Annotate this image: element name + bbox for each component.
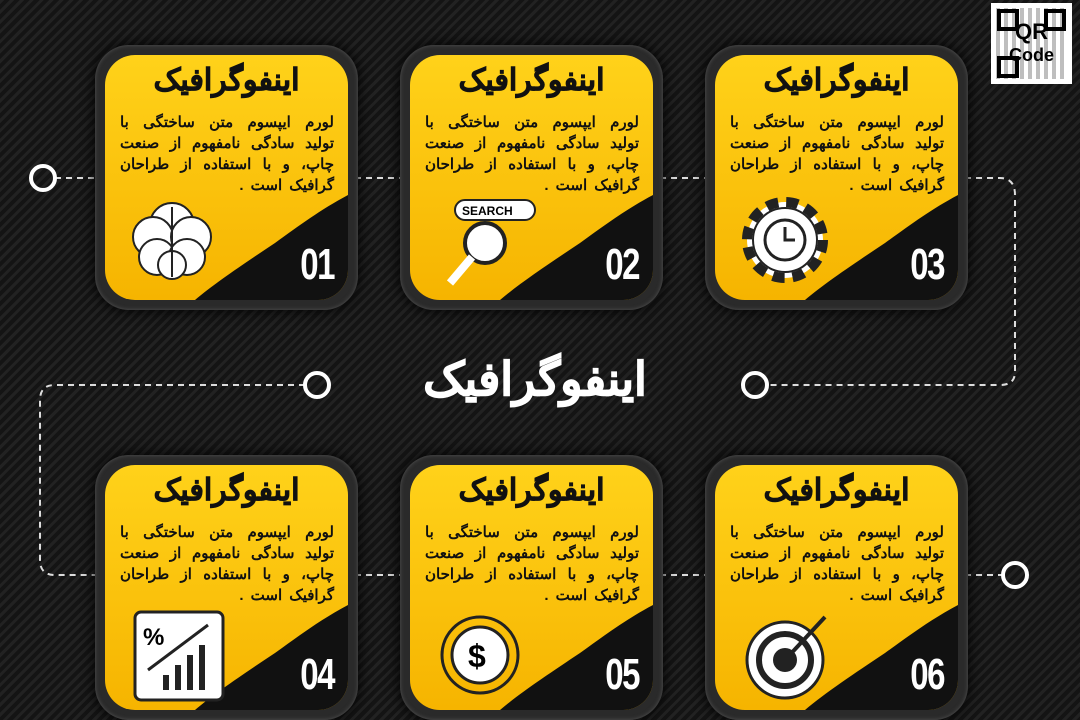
icon: growth chart bbox=[134, 610, 224, 702]
icon: growth chart: % bbox=[143, 624, 164, 651]
icon: brain bbox=[132, 202, 212, 280]
icon: search: SEARCH bbox=[462, 204, 513, 218]
card 05: 05 bbox=[605, 650, 639, 699]
card 02: اینفوگرافیک bbox=[459, 64, 604, 97]
card 06 bbox=[705, 455, 968, 720]
icon: gear clock bbox=[742, 197, 828, 283]
icon: QR code: QR bbox=[1015, 19, 1048, 44]
card 03: اینفوگرافیک bbox=[764, 64, 909, 97]
card 01 bbox=[95, 45, 358, 310]
icon: dollar coin: $ bbox=[468, 638, 486, 674]
icon: target bbox=[746, 616, 826, 700]
card 04: 04 bbox=[300, 650, 334, 699]
card 05 bbox=[400, 455, 663, 720]
icon: QR code: Code bbox=[1009, 45, 1054, 65]
card 01: اینفوگرافیک bbox=[154, 64, 299, 97]
icon: dollar coin bbox=[440, 616, 520, 694]
card 04: اینفوگرافیک bbox=[154, 474, 299, 507]
card 05: اینفوگرافیک bbox=[459, 474, 604, 507]
card 02 bbox=[400, 45, 663, 310]
card 04 bbox=[95, 455, 358, 720]
card 03: 03 bbox=[910, 240, 944, 289]
card 03: لورم ایپسوم متن ساختگی با تولید سادگی نامفهوم از صنعت چاپ، و با استفاده از طراحان گرافیک است . bbox=[730, 114, 944, 194]
icon: QR code bbox=[991, 3, 1072, 84]
card 03 bbox=[705, 45, 968, 310]
card 02: 02 bbox=[605, 240, 639, 289]
card 06: لورم ایپسوم متن ساختگی با تولید سادگی نامفهوم از صنعت چاپ، و با استفاده از طراحان گرافیک است . bbox=[730, 524, 944, 604]
card 06: اینفوگرافیک bbox=[764, 474, 909, 507]
card 06: 06 bbox=[910, 650, 944, 699]
title: اینفوگرافیک bbox=[423, 353, 647, 405]
card 02: لورم ایپسوم متن ساختگی با تولید سادگی نامفهوم از صنعت چاپ، و با استفاده از طراحان گرافیک است . bbox=[425, 114, 639, 194]
card 01: 01 bbox=[300, 240, 334, 289]
icon: search bbox=[447, 199, 536, 286]
card 05: لورم ایپسوم متن ساختگی با تولید سادگی نامفهوم از صنعت چاپ، و با استفاده از طراحان گرافیک است . bbox=[425, 524, 639, 604]
card 01: لورم ایپسوم متن ساختگی با تولید سادگی نامفهوم از صنعت چاپ، و با استفاده از طراحان گرافیک است . bbox=[120, 114, 334, 194]
card 04: لورم ایپسوم متن ساختگی با تولید سادگی نامفهوم از صنعت چاپ، و با استفاده از طراحان گرافیک است . bbox=[120, 524, 334, 604]
